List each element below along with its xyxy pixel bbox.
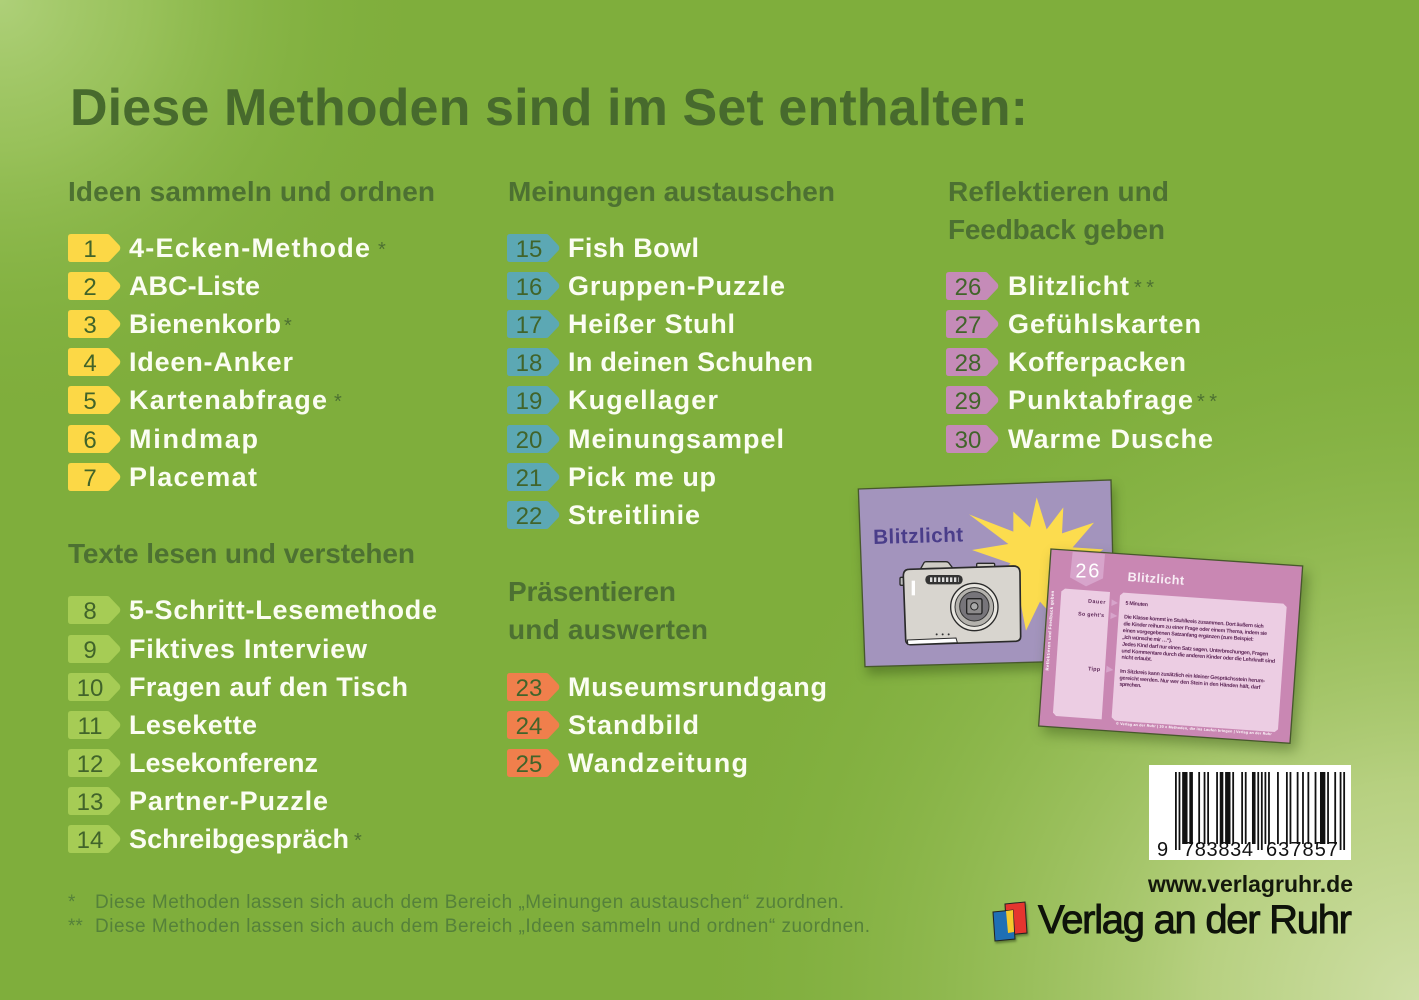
item 13: Partner-Puzzle — [129, 786, 328, 816]
publisher url: www.verlagruhr.de — [1147, 871, 1353, 897]
item 25: Wandzeitung — [568, 748, 748, 778]
item 15: 15 — [516, 236, 542, 263]
description text — [1119, 601, 1275, 691]
item 26 — [946, 271, 1154, 301]
item 30: 30 — [955, 427, 981, 454]
item 15 — [507, 233, 699, 263]
icon: flash star — [969, 497, 1103, 631]
card heading: Blitzlicht — [1127, 570, 1185, 588]
item 21: 21 — [516, 465, 542, 492]
item 6: Mindmap — [129, 424, 258, 454]
item 22: Streitlinie — [568, 500, 700, 530]
description text: nicht erlaubt. — [1121, 655, 1153, 663]
description text: gereicht werden. Nur wer den Stein in den Händen hält, darf — [1119, 675, 1261, 691]
item 5: * — [334, 391, 342, 413]
item 4: 4 — [83, 350, 97, 377]
item 30: Warme Dusche — [1008, 424, 1213, 454]
item 2: ABC-Liste — [129, 271, 260, 301]
barcode digits: 9 — [1157, 839, 1168, 861]
column: Reflektieren und Feedback geben — [946, 176, 1217, 454]
labels — [1078, 599, 1106, 673]
item 9: 9 — [83, 637, 97, 664]
item 17: Heißer Stuhl — [568, 309, 735, 339]
card number: 26 — [1075, 561, 1099, 583]
card title: Blitzlicht — [873, 523, 964, 549]
item 3: * — [284, 315, 292, 337]
item 26: 26 — [955, 274, 981, 301]
item 2: 2 — [83, 274, 97, 301]
labels: So geht's — [1078, 611, 1104, 619]
barcode digits: 637857 — [1266, 839, 1338, 861]
number tab — [1070, 552, 1105, 586]
item 27: 27 — [955, 312, 981, 339]
icon: camera — [900, 562, 1021, 645]
item 23: 23 — [516, 675, 542, 702]
description text: 5 Minuten — [1125, 601, 1148, 608]
heading: Reflektieren und Feedback geben: Feedback geben — [948, 214, 1165, 245]
footnote 2: ** — [68, 916, 83, 937]
bars — [1175, 772, 1345, 850]
barcode digits: 783834 — [1183, 839, 1253, 861]
item 3: 3 — [83, 312, 97, 339]
item 6 — [68, 424, 258, 454]
item 14: 14 — [77, 827, 103, 854]
item 20: Meinungsampel — [568, 424, 784, 454]
item 5: 5 — [83, 388, 97, 415]
item 24 — [507, 710, 699, 740]
column: Ideen sammeln und ordnen — [68, 176, 435, 492]
description text: einen vorgegebenen Satzanfang ergänzen (zum Beispiel: — [1123, 628, 1254, 643]
footnote 1: * — [68, 892, 76, 913]
item 24: Standbild — [568, 710, 699, 740]
heading: Meinungen austauschen: Meinungen austauschen — [508, 176, 835, 207]
item 22: 22 — [516, 503, 542, 530]
item 4: Ideen-Anker — [129, 347, 293, 377]
item 12: 12 — [77, 751, 103, 778]
item 11: Lesekette — [129, 710, 257, 740]
item 11: 11 — [78, 713, 102, 740]
footer line: © Verlag an der Ruhr | 30 x Methoden, die ins Laufen bringen | Verlag an der Ruhr — [1116, 722, 1272, 736]
vertical side label: Reflektieren und Feedback geben — [1045, 590, 1055, 671]
item 8: 8 — [83, 598, 97, 625]
heading: Präsentieren und auswerten: und auswerten — [508, 614, 708, 645]
item 9: Fiktives Interview — [129, 634, 368, 664]
item 29: ** — [1197, 391, 1217, 413]
item 16: 16 — [516, 274, 542, 301]
column: Meinungen austauschen — [507, 176, 835, 530]
item 18: In deinen Schuhen — [568, 347, 813, 377]
item 5: Kartenabfrage — [129, 385, 327, 415]
item 13: 13 — [77, 789, 103, 816]
item 28: Kofferpacken — [1008, 347, 1186, 377]
column: Präsentieren und auswerten — [507, 576, 827, 778]
item 27: Gefühlskarten — [1008, 309, 1201, 339]
item 19: Kugellager — [568, 385, 718, 415]
item 3 — [68, 309, 292, 339]
item 2 — [68, 271, 260, 301]
item 3: Bienenkorb — [129, 309, 281, 339]
description text: Jedes Kind darf nur einen Satz sagen. Unterbrechungen, Fragen — [1122, 642, 1269, 658]
item 16: Gruppen-Puzzle — [568, 271, 785, 301]
item 10: 10 — [77, 675, 103, 702]
item 7: 7 — [83, 465, 97, 492]
footnote 1: Diese Methoden lassen sich auch dem Bereich „Meinungen austauschen“ zuordnen. — [95, 892, 844, 913]
item 1: 1 — [83, 236, 97, 263]
description text: Die Klasse kommt im Stuhlkreis zusammen. Dort äußern sich — [1124, 614, 1264, 630]
item 17: 17 — [516, 312, 542, 339]
heading: Ideen sammeln und ordnen: Ideen sammeln und ordnen — [68, 176, 435, 207]
item 7: Placemat — [129, 462, 257, 492]
description text: und Kommentare durch die anderen Kinder oder die Lehrkraft sind — [1121, 648, 1275, 665]
title: Diese Methoden sind im Set enthalten: — [70, 79, 1028, 137]
arrows — [1106, 599, 1118, 673]
item 14: Schreibgespräch — [129, 824, 349, 854]
item 23: Museumsrundgang — [568, 672, 827, 702]
right text panel — [1112, 593, 1287, 732]
item 25: 25 — [516, 751, 542, 778]
publisher name: Verlag an der Ruhr — [1038, 898, 1352, 942]
left label panel — [1053, 589, 1110, 719]
item 26: Blitzlicht — [1008, 271, 1129, 301]
item 8: 5-Schritt-Lesemethode — [129, 595, 437, 625]
item 24: 24 — [516, 713, 542, 740]
item 10: Fragen auf den Tisch — [129, 672, 408, 702]
icon: publisher logo — [993, 902, 1027, 941]
item 22 — [507, 500, 700, 530]
item 1: 4-Ecken-Methode — [129, 233, 370, 263]
heading: Präsentieren und auswerten: Präsentieren — [508, 576, 676, 607]
item 11 — [68, 710, 257, 740]
item 29: Punktabfrage — [1008, 385, 1193, 415]
description text: „Ich wünsche mir …“). — [1122, 635, 1173, 644]
item 29 — [946, 385, 1217, 415]
description text: Im Sitzkreis kann zusätzlich ein kleiner Gesprächsstein herum- — [1120, 669, 1265, 685]
item 26: ** — [1134, 277, 1154, 299]
front card: method description — [1039, 549, 1303, 743]
footnote 2: Diese Methoden lassen sich auch dem Bereich „Ideen sammeln und ordnen“ zuordnen. — [95, 916, 870, 937]
heading: Reflektieren und Feedback geben: Reflektieren und — [948, 176, 1169, 207]
item 14: * — [354, 830, 362, 852]
card illustration: Blitzlicht — [858, 480, 1303, 743]
description text: sprechen. — [1119, 682, 1142, 689]
heading: Texte lesen und verstehen: Texte lesen und verstehen — [68, 538, 415, 569]
item 18: 18 — [516, 350, 542, 377]
item 28: 28 — [955, 350, 981, 377]
item 20: 20 — [516, 427, 542, 454]
footnotes — [68, 892, 870, 937]
item 21: Pick me up — [568, 462, 716, 492]
item 1: * — [378, 239, 386, 261]
labels: Dauer — [1088, 599, 1106, 606]
item 15: Fish Bowl — [568, 233, 699, 263]
description text: die Kinder reihum zu einer Frage oder einem Thema, indem sie — [1123, 621, 1267, 637]
column: Texte lesen und verstehen — [68, 538, 437, 854]
item 7 — [68, 462, 257, 492]
item 29: 29 — [955, 388, 981, 415]
back card: camera and flash — [858, 480, 1115, 667]
item 12: Lesekonferenz — [129, 748, 318, 778]
barcode — [1149, 765, 1351, 861]
labels: Tipp — [1088, 666, 1101, 673]
item 19: 19 — [516, 388, 542, 415]
item 6: 6 — [83, 427, 97, 454]
